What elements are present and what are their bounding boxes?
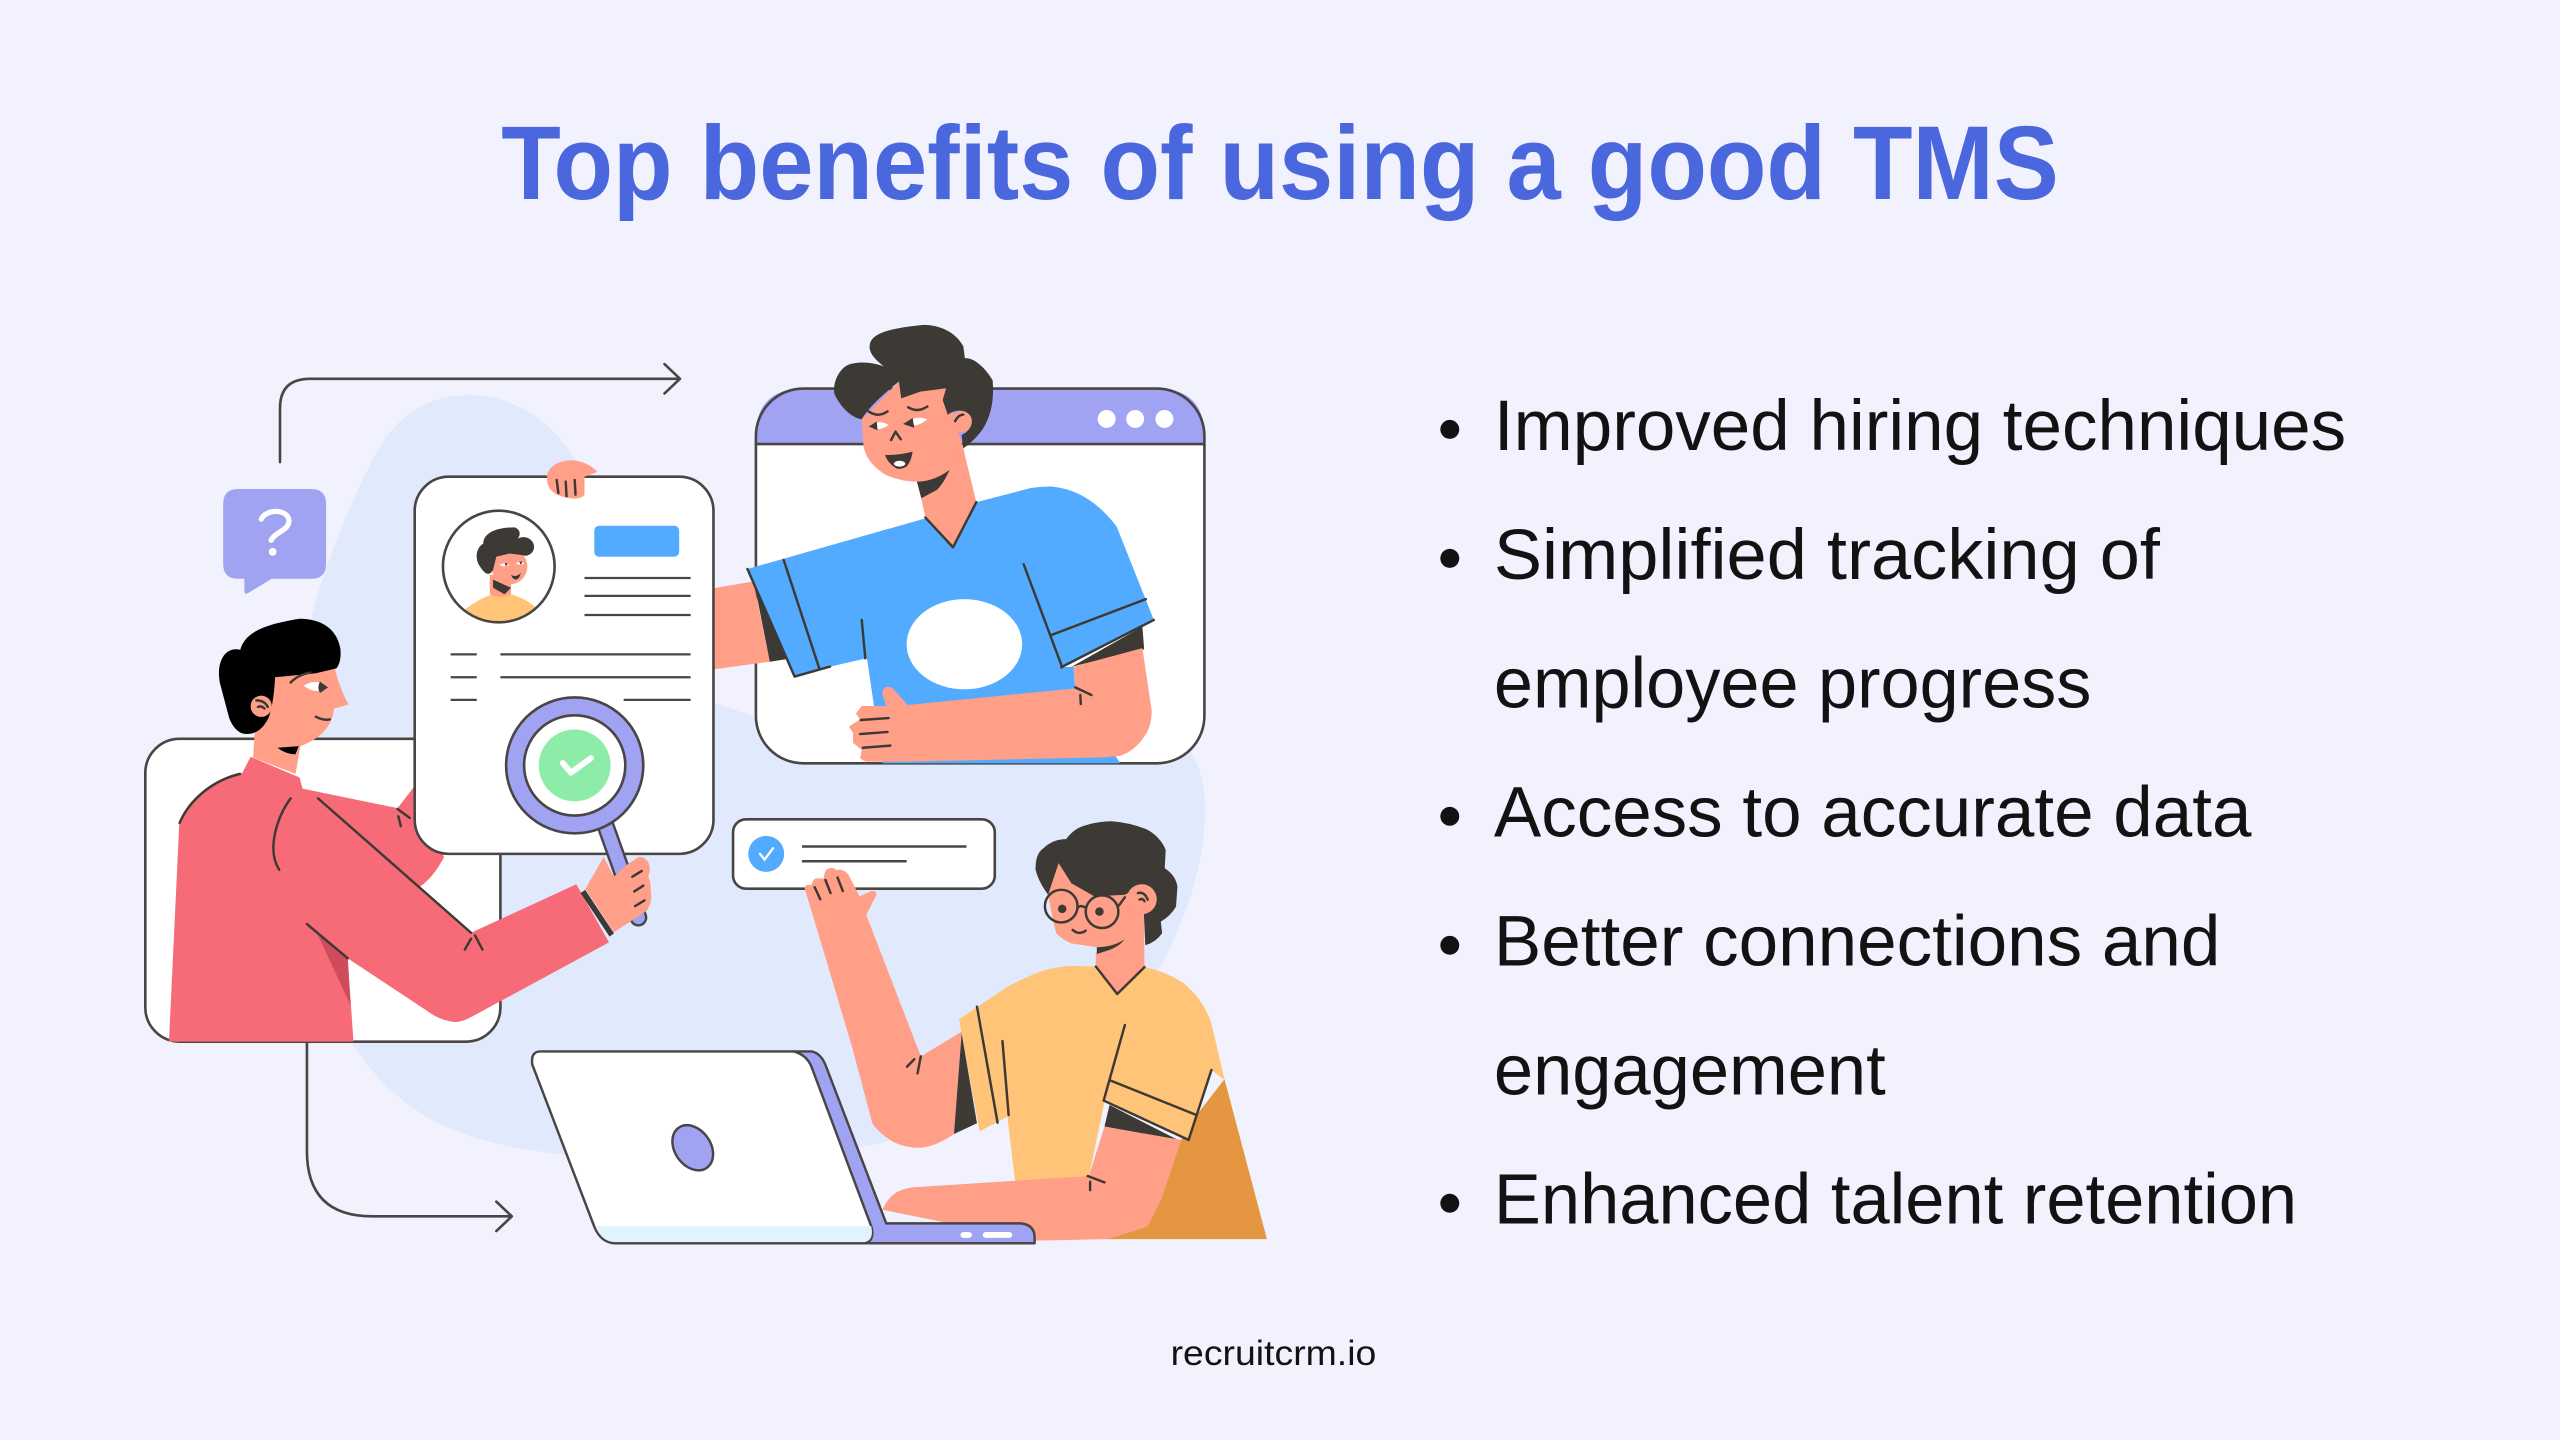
person: blue shirt — [713, 325, 1154, 763]
raised arm — [805, 868, 962, 1148]
bullet 1: Improved hiring techniques — [1494, 387, 2346, 466]
profile avatar — [443, 511, 555, 622]
person: orange shirt at laptop — [805, 821, 1267, 1241]
person: man in red — [169, 619, 609, 1042]
title: Top benefits of using a good TMS — [501, 105, 2059, 222]
bullet 4: Better connections and — [1494, 903, 2220, 982]
arrow: top — [280, 364, 680, 462]
icon: question speech bubble — [223, 489, 326, 594]
lower arm — [883, 1127, 1181, 1241]
hand holding magnifier — [583, 857, 651, 935]
benefits list — [1440, 387, 2346, 1240]
bullet 2: Simplified tracking of — [1494, 516, 2160, 595]
head — [219, 619, 349, 774]
head — [1036, 821, 1177, 994]
bullet 2: employee progress — [1494, 645, 2091, 724]
arrow: bottom — [307, 1042, 512, 1231]
red sweater — [169, 757, 609, 1042]
panel: resume document — [415, 460, 713, 854]
blue label — [594, 526, 679, 557]
bullet 3: Access to accurate data — [1494, 774, 2252, 853]
window frame — [756, 389, 1204, 763]
footer url: recruitcrm.io — [1171, 1334, 1376, 1373]
bullet 5: Enhanced talent retention — [1494, 1161, 2297, 1240]
shirt — [959, 966, 1224, 1182]
bullet 4: engagement — [1494, 1032, 1886, 1111]
chair — [1107, 1079, 1267, 1239]
panel: browser window person — [713, 325, 1204, 763]
bullet 2 — [1440, 516, 2160, 724]
hand holding document — [547, 460, 598, 499]
background blob — [293, 395, 1205, 1156]
notification card — [733, 819, 995, 889]
panel: left card — [145, 739, 500, 1042]
icon: magnifying glass — [506, 697, 643, 918]
bullet 4 — [1440, 903, 2220, 1111]
document text lines — [451, 578, 691, 700]
laptop — [532, 1051, 1035, 1243]
illustration: recruitment scene — [145, 325, 1267, 1243]
